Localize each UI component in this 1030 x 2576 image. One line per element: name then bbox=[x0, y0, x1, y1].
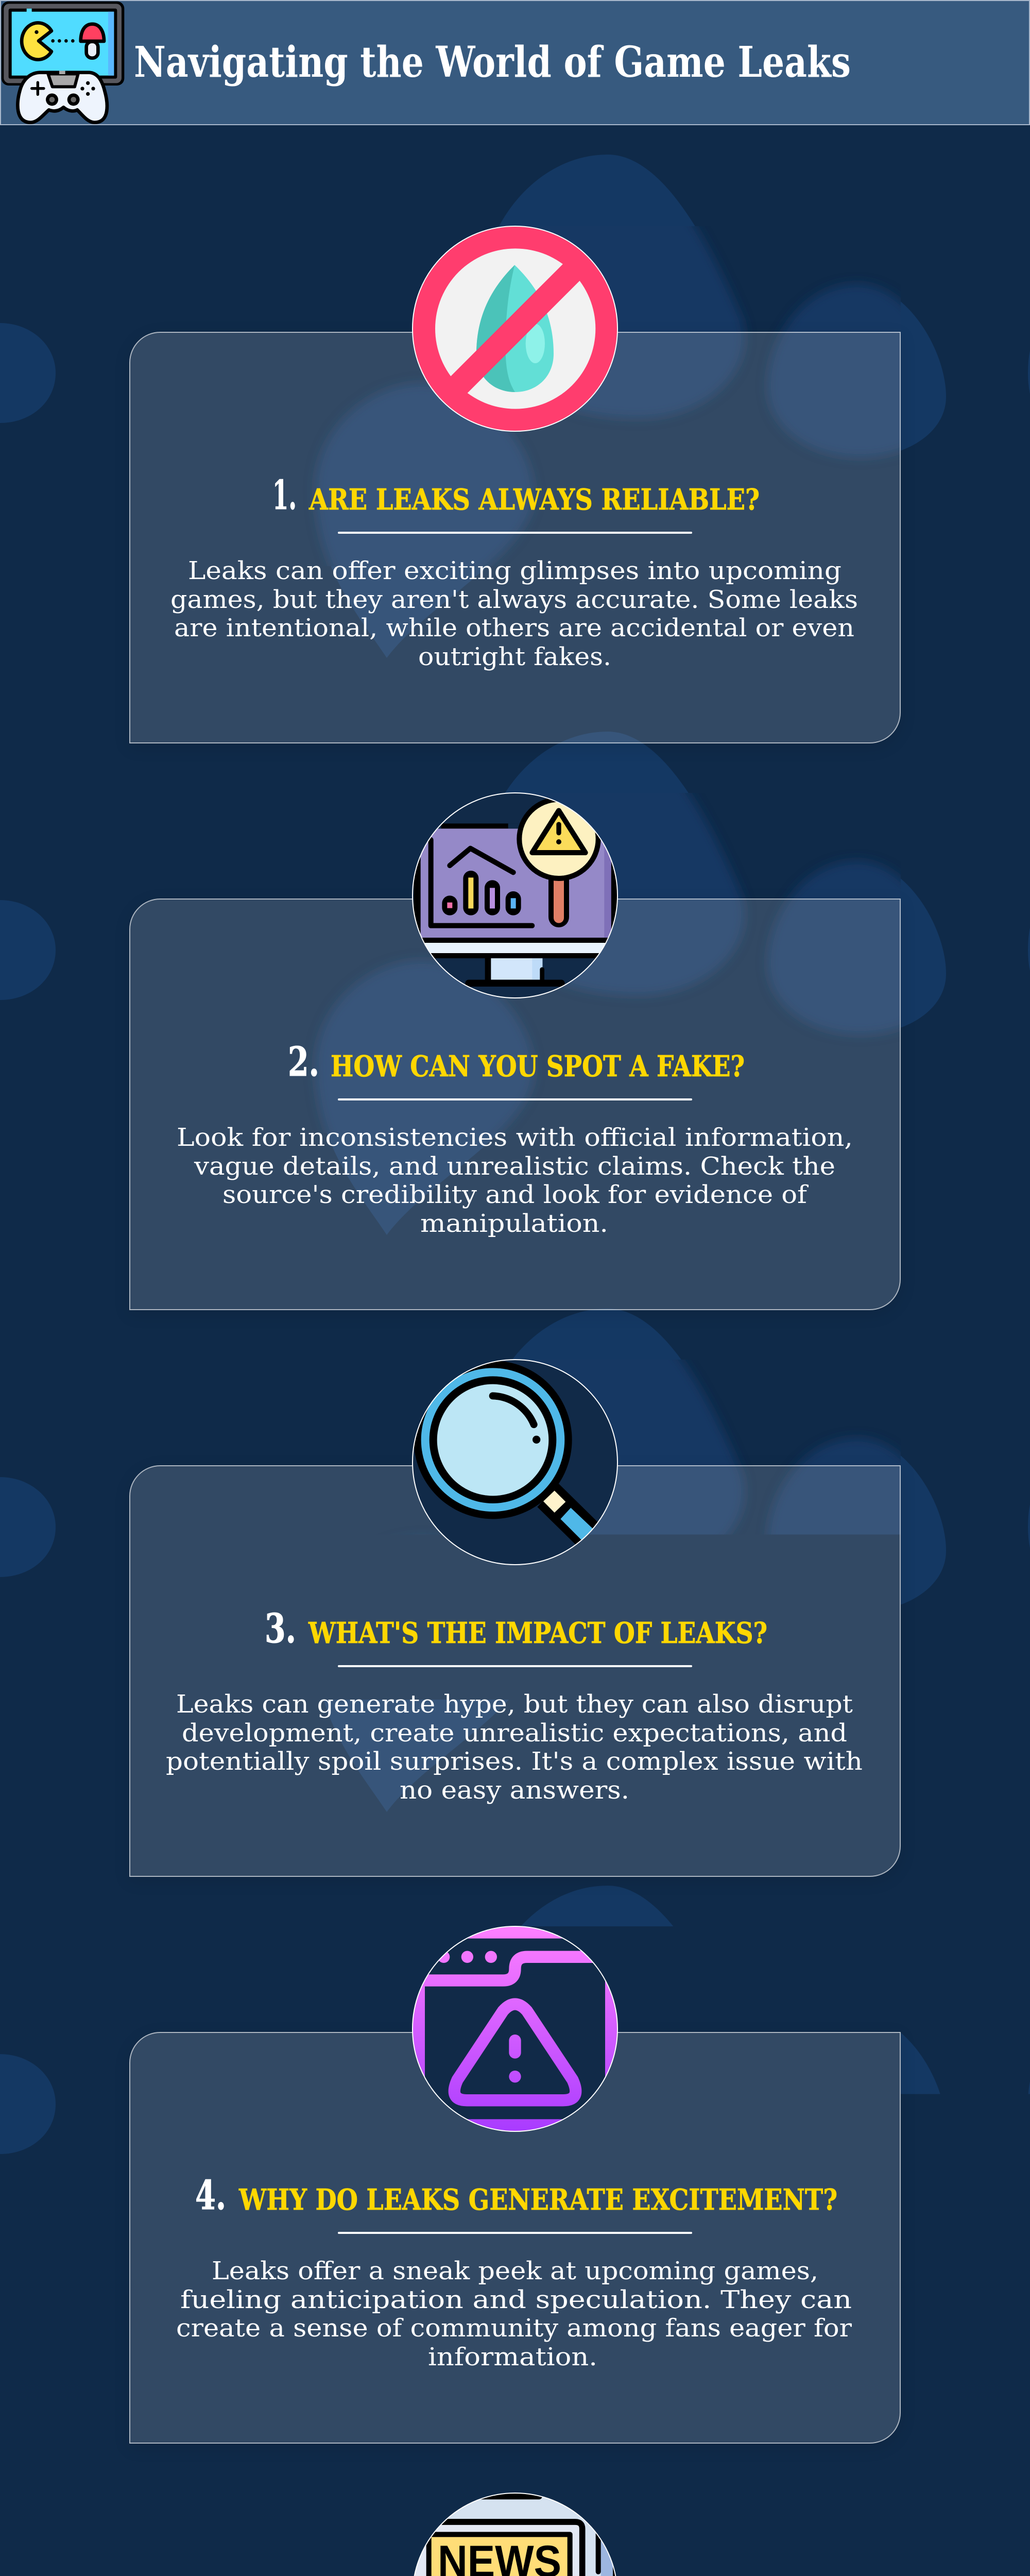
card text 4: fueling anticipation and speculation. They can bbox=[180, 2285, 852, 2314]
card text 2 bbox=[129, 793, 901, 1310]
card text 3: potentially spoil surprises. It's a complex issue with bbox=[166, 1747, 863, 1776]
icon: game monitor and controller bbox=[0, 0, 258, 125]
card text 2: Look for inconsistencies with official information, bbox=[177, 1123, 853, 1152]
card text 3 bbox=[129, 1360, 901, 1877]
panel: impact of leaks bbox=[129, 1360, 901, 1877]
icon: browser warning bbox=[412, 1926, 618, 2132]
card text 2: manipulation. bbox=[420, 1209, 608, 1238]
card text 1: games, but they aren't always accurate. Some leaks bbox=[170, 585, 858, 614]
panel: how to respond to leaks bbox=[129, 2493, 901, 2576]
card text 4: create a sense of community among fans eager for bbox=[176, 2314, 852, 2343]
icon: no leak sign bbox=[412, 226, 618, 432]
card text 2: HOW CAN YOU SPOT A FAKE? bbox=[331, 1049, 745, 1083]
icon: magnifying glass bbox=[412, 1359, 618, 1565]
title: Navigating the World of Game Leaks bbox=[134, 38, 851, 87]
card text 2: vague details, and unrealistic claims. Check the bbox=[194, 1152, 835, 1181]
card text 3: Leaks can generate hype, but they can also disrupt bbox=[176, 1690, 853, 1719]
card text 1: Leaks can offer exciting glimpses into upcoming bbox=[188, 556, 842, 585]
card text 4: information. bbox=[428, 2343, 597, 2371]
card text 3: no easy answers. bbox=[400, 1776, 629, 1805]
card text 1: 1. bbox=[272, 472, 297, 519]
card text 4 bbox=[129, 1926, 901, 2444]
card text 1 bbox=[129, 226, 901, 743]
panel: how can you spot a fake bbox=[129, 793, 901, 1310]
card text 1: outright fakes. bbox=[418, 642, 611, 671]
card text 2: 2. bbox=[288, 1039, 319, 1086]
header bar bbox=[0, 0, 1030, 125]
card text 1: are intentional, while others are accidental or even bbox=[174, 614, 854, 642]
panel: why leaks generate excitement bbox=[129, 1926, 901, 2444]
card text 3: development, create unrealistic expectations, and bbox=[182, 1719, 847, 1748]
card text 4: Leaks offer a sneak peek at upcoming games, bbox=[212, 2257, 818, 2285]
card text 3: WHAT'S THE IMPACT OF LEAKS? bbox=[308, 1616, 767, 1650]
card text 2: source's credibility and look for evidence of bbox=[222, 1180, 809, 1209]
card text 1: ARE LEAKS ALWAYS RELIABLE? bbox=[308, 483, 760, 517]
card text 4: 4. bbox=[195, 2172, 226, 2219]
card text 3: 3. bbox=[265, 1605, 296, 1652]
card text 5 bbox=[129, 2493, 901, 2576]
icon: monitor with warning magnifier bbox=[412, 792, 618, 998]
panel: are leaks always reliable bbox=[129, 226, 901, 743]
icon: newspaper bbox=[412, 2493, 618, 2576]
